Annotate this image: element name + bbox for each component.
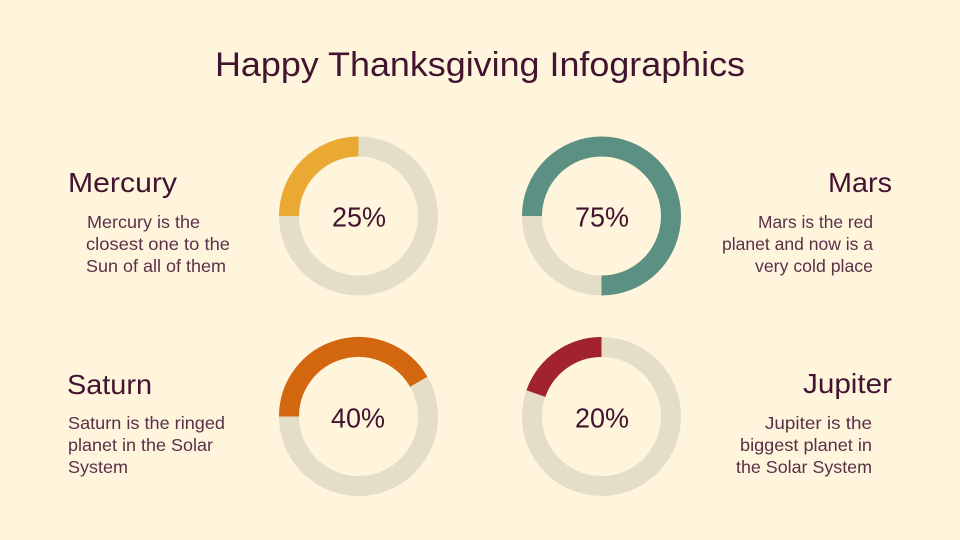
text block: Mercury description: closest one to the [86,234,230,254]
donut chart: 25%: 25% [332,202,386,232]
text block: Jupiter description: the Solar System [736,457,872,477]
text block: Saturn description: Saturn is the ringed [68,413,225,433]
panel: Mars [532,146,892,286]
text block: Mercury description [86,212,230,276]
panel: Saturn [67,347,428,486]
heading: Saturn: Saturn [67,369,152,400]
text block: Jupiter description: Jupiter is the [765,413,872,433]
text block: Jupiter description [736,413,872,477]
heading: Mars: Mars [828,167,892,198]
panel: Mercury [68,146,428,286]
heading: Mercury: Mercury [68,167,177,198]
text block: Mars description: very cold place [755,256,873,276]
heading: Jupiter: Jupiter [803,368,892,399]
donut chart: 40% [289,347,428,486]
panel: Jupiter [532,347,892,486]
donut chart: 20% [532,347,671,486]
text block: Mars description: planet and now is a [722,234,873,254]
donut chart: 40%: 40% [331,402,385,434]
donut chart: 75% [532,146,671,286]
donut chart: 25% [289,146,428,286]
title: Happy Thanksgiving Infographics [215,46,745,84]
text block: Jupiter description: biggest planet in [740,435,872,455]
donut chart: 75%: 75% [575,202,629,232]
donut chart: 20%: 20% [575,402,629,434]
text block: Mars description [722,212,873,276]
text block: Mercury description: Mercury is the [87,212,200,232]
text block: Saturn description [68,413,225,477]
text block: Saturn description: System [68,457,128,477]
text block: Saturn description: planet in the Solar [68,435,213,455]
text block: Mars description: Mars is the red [758,212,873,232]
text block: Mercury description: Sun of all of them [86,256,226,276]
